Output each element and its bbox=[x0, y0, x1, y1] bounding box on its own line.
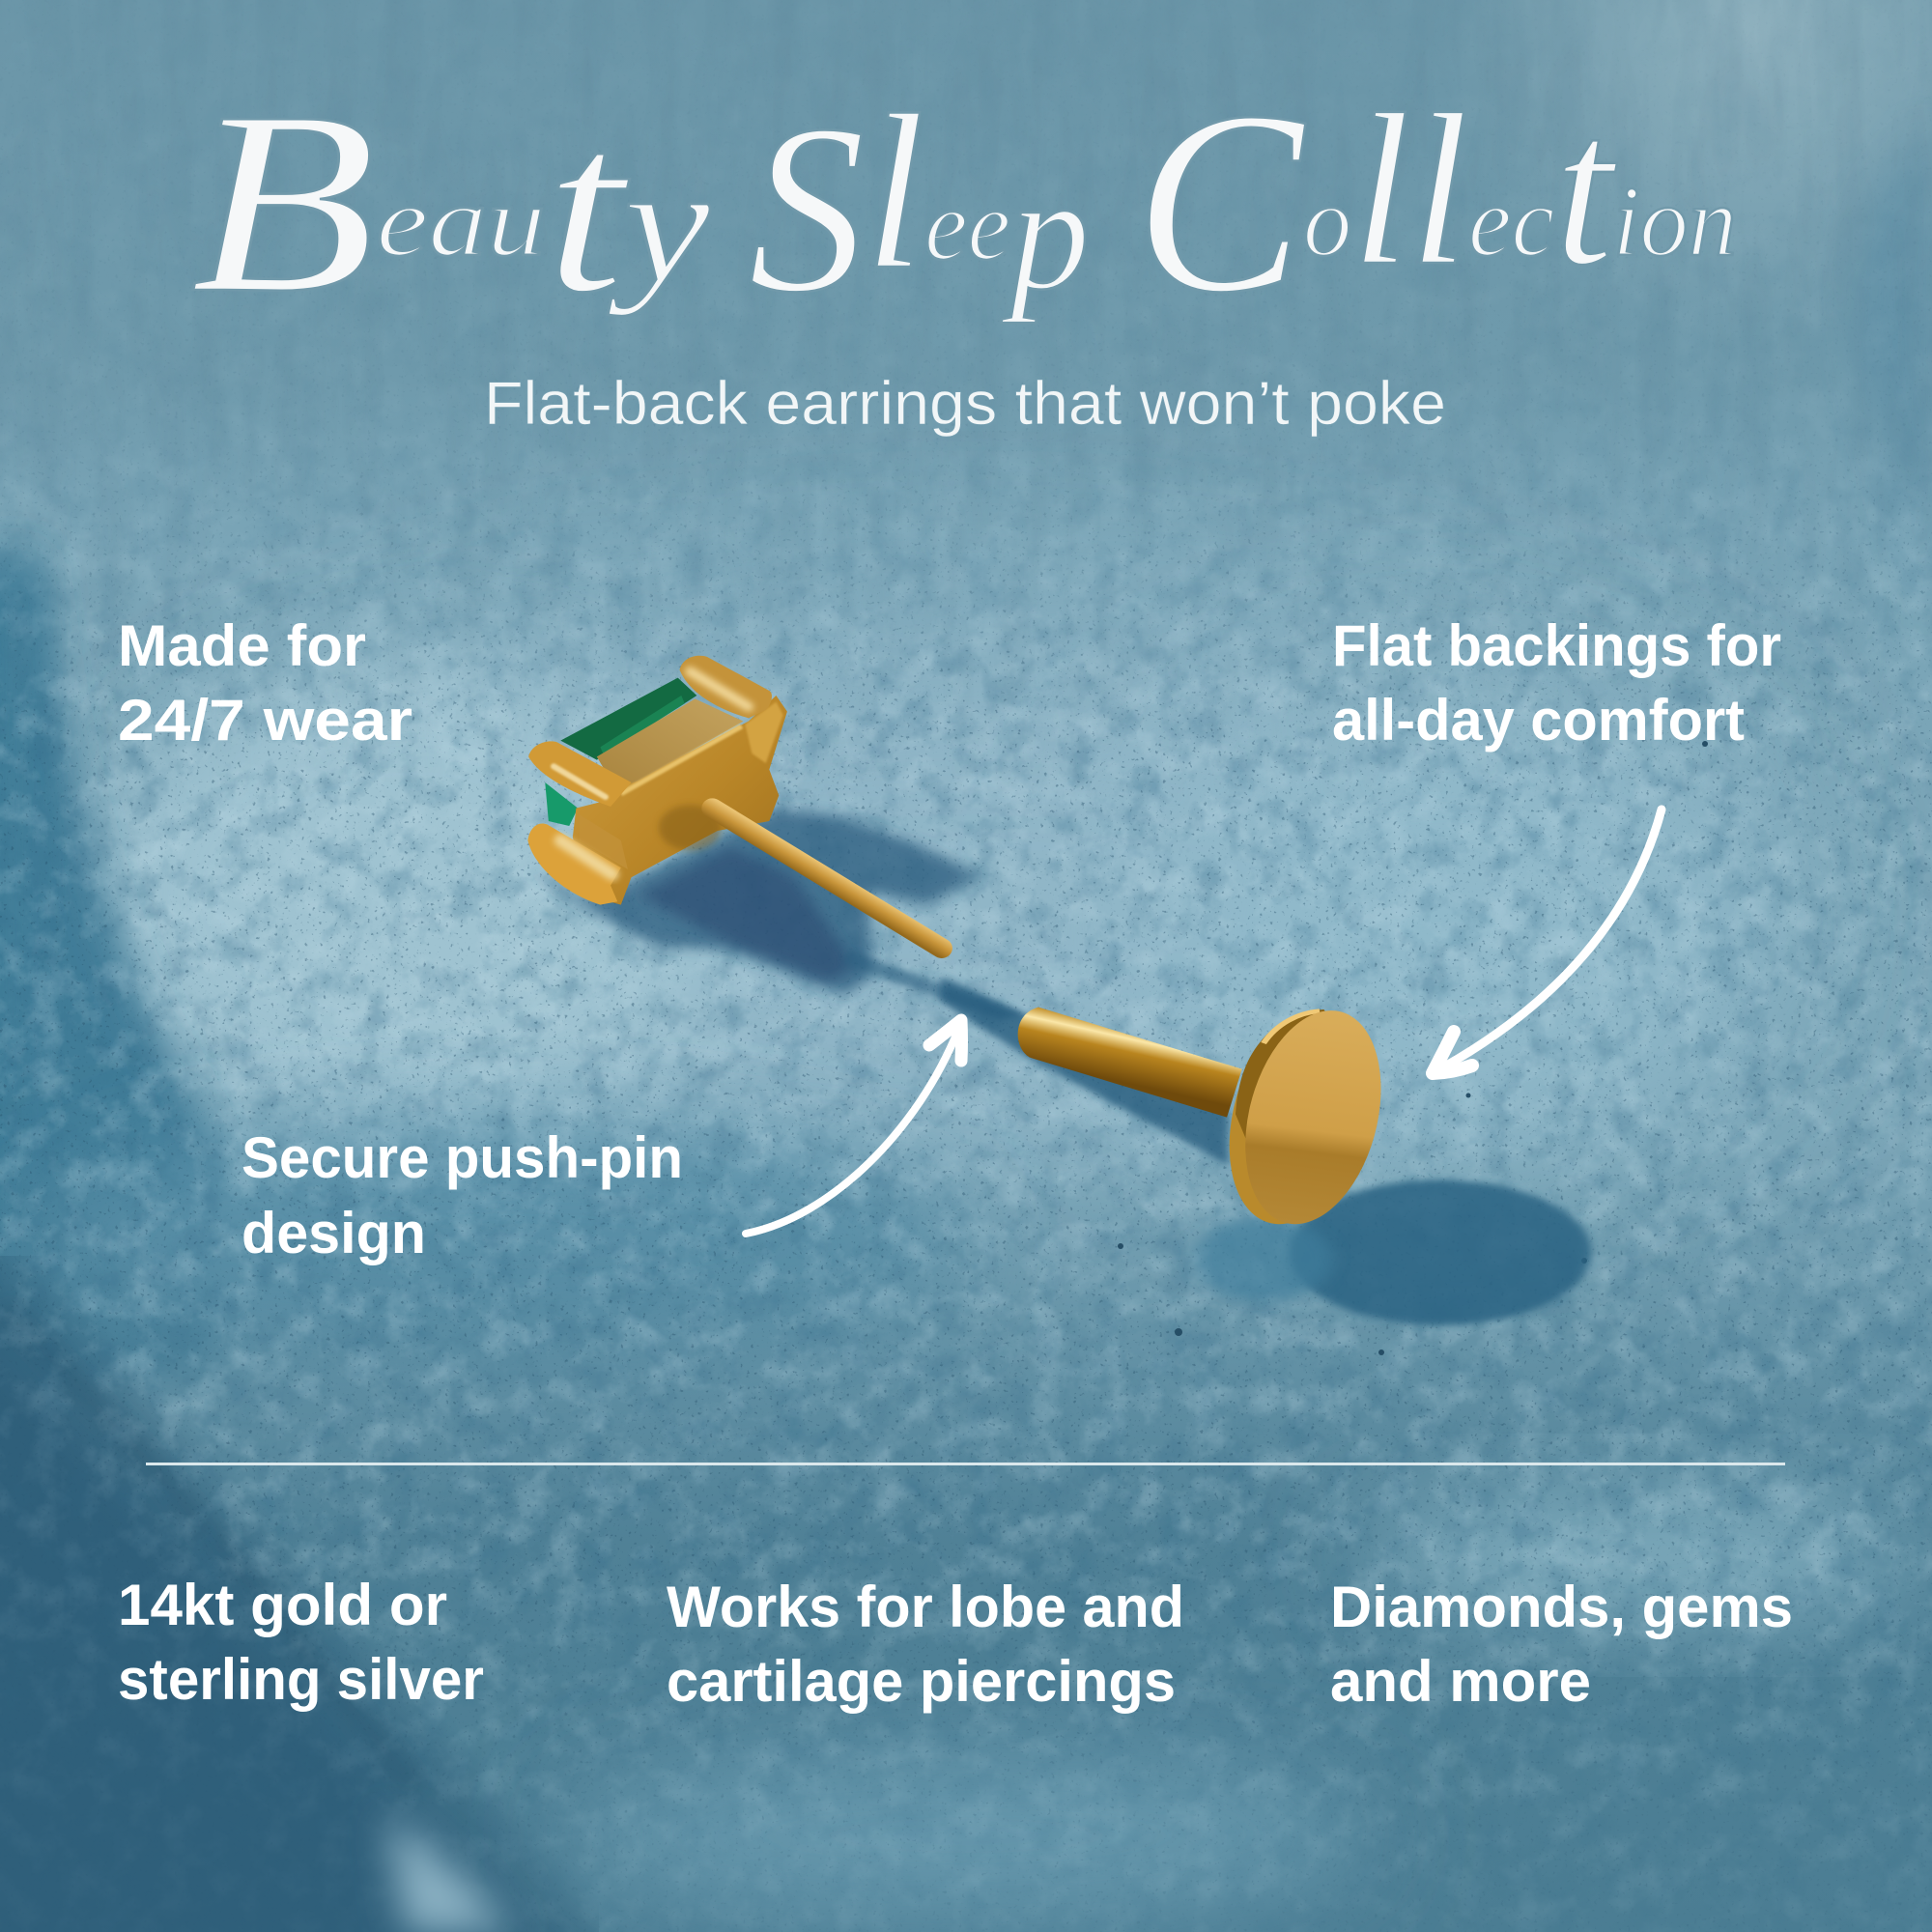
callout: Made for 24/7 wear bbox=[118, 613, 412, 753]
callout: Secure push-pin design: Secure push-pin bbox=[242, 1125, 683, 1190]
title word: Collection: ll bbox=[1351, 69, 1468, 310]
pin bbox=[1018, 1008, 1242, 1118]
flat back disc and pin bbox=[940, 976, 1591, 1325]
callout: Flat backings for all-day comfort: Flat backings for bbox=[1332, 613, 1781, 678]
title word: Collection: t bbox=[1554, 69, 1618, 310]
feature: Works for lobe and cartilage piercings bbox=[667, 1575, 1184, 1714]
feature: Works for lobe and cartilage piercings: Works for lobe and bbox=[667, 1575, 1184, 1639]
disc rim bbox=[1210, 1004, 1383, 1232]
title word: Sleep: l bbox=[865, 69, 924, 315]
prong top right bbox=[679, 656, 772, 718]
title word: Beauty: eau bbox=[377, 166, 546, 277]
title word: Beauty: y bbox=[607, 133, 711, 317]
title word: Collection: ion bbox=[1613, 166, 1737, 277]
feature: Diamonds, gems and more bbox=[1330, 1575, 1793, 1714]
stud earring with emerald bbox=[525, 656, 1024, 1021]
stud post bbox=[712, 809, 942, 949]
disc shadows bbox=[940, 976, 1591, 1325]
gold setting bbox=[527, 656, 787, 905]
callout: Made for 24/7 wear: Made for bbox=[118, 613, 366, 678]
subtitle: Flat-back earrings that won’t poke bbox=[484, 370, 1446, 438]
callout: Secure push-pin design bbox=[242, 1125, 683, 1265]
divider bbox=[146, 1463, 1785, 1465]
arrow: points to push-pin bbox=[746, 1020, 962, 1234]
feature: 14kt gold or sterling silver: 14kt gold or bbox=[118, 1573, 447, 1637]
prong bottom left bbox=[527, 823, 621, 905]
title word: Sleep: S bbox=[749, 75, 865, 343]
prong left bbox=[528, 741, 632, 807]
callout: Flat backings for all-day comfort: all-day comfort bbox=[1332, 688, 1745, 753]
arrow: points to flat backing bbox=[1433, 810, 1662, 1073]
disc face bbox=[1227, 1004, 1400, 1232]
feature: 14kt gold or sterling silver: sterling silver bbox=[118, 1647, 484, 1712]
callout: Made for 24/7 wear: 24/7 wear bbox=[118, 688, 412, 753]
title word: Collection: o bbox=[1303, 166, 1351, 277]
stud shadow bbox=[525, 809, 1024, 1021]
title word: Sleep: p bbox=[1001, 142, 1090, 324]
feature: Diamonds, gems and more: Diamonds, gems bbox=[1330, 1575, 1793, 1639]
title word: Beauty: t bbox=[546, 75, 630, 343]
feature: Diamonds, gems and more: and more bbox=[1330, 1649, 1591, 1714]
title word: Beauty: B bbox=[190, 58, 377, 347]
callout: Secure push-pin design: design bbox=[242, 1201, 426, 1265]
callout: Flat backings for all-day comfort bbox=[1332, 613, 1781, 753]
title word: Collection: ec bbox=[1468, 166, 1554, 277]
title bbox=[190, 58, 1737, 347]
emerald stone bbox=[545, 678, 696, 826]
feature: 14kt gold or sterling silver bbox=[118, 1573, 484, 1712]
feature: Works for lobe and cartilage piercings: cartilage piercings bbox=[667, 1649, 1176, 1714]
title word: Collection: C bbox=[1135, 58, 1308, 347]
title word: Sleep: ee bbox=[924, 170, 1010, 281]
